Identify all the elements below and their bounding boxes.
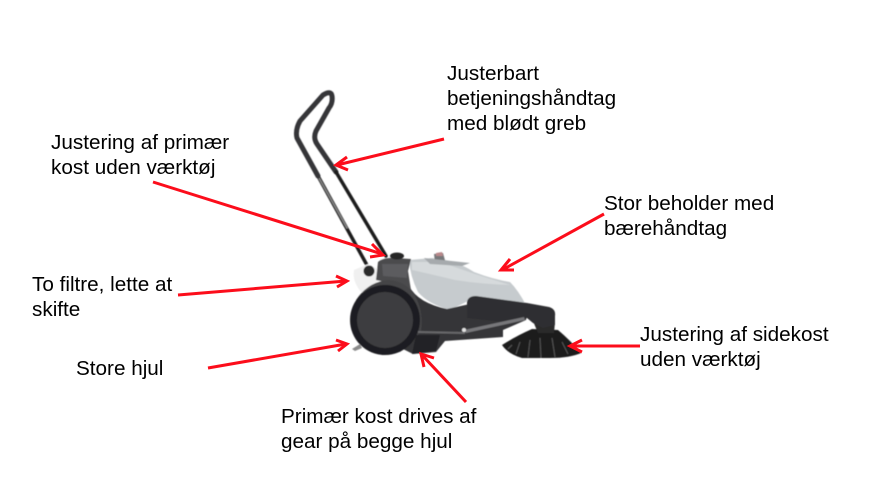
main grey container [409,258,526,310]
label: primary brush gear [281,405,476,453]
lower dark body [385,285,527,354]
label: primary brush adjustment: kost uden værktøj [51,156,215,179]
label: primary brush gear: Primær kost drives af [281,405,476,428]
frame rod [418,331,465,334]
side brush rod [464,317,525,333]
label: primary brush gear: gear på begge hjul [281,430,452,453]
wheel fender [356,280,422,352]
arrow: primary brush adjustment [153,182,383,257]
label: primary brush adjustment [51,131,229,179]
white filter housing [354,264,382,293]
label: large wheels: Store hjul [76,357,163,380]
label: adjustable handle [447,62,616,135]
handle [296,93,386,267]
container handle [434,253,446,264]
handle hinge [364,266,374,276]
arrow: handle [336,139,444,170]
arrow: filters [178,276,347,295]
label: adjustable handle: med blødt greb [447,112,586,135]
side brush neck [533,321,555,333]
label: large container [604,192,774,240]
top knob [390,252,404,260]
lower brush housing [412,335,440,354]
label: side brush adjustment: Justering af sidekost [640,323,829,346]
label: side brush adjustment [640,323,829,371]
label: primary brush adjustment: Justering af primær [51,131,229,154]
arrows [153,139,640,402]
side arm [467,296,555,328]
wheel [350,285,420,355]
label: large container: Stor beholder med [604,192,774,215]
label: two filters: skifte [32,298,80,321]
label: large container: bærehåndtag [604,217,727,240]
sweeper machine [296,93,581,358]
label: adjustable handle: Justerbart [447,62,539,85]
label: side brush adjustment: uden værktøj [640,348,761,371]
arrow: container [501,214,604,270]
arrow: primary brush gear [421,354,466,402]
arrow: side brush [570,340,640,352]
label: two filters: To filtre, lette at [32,273,172,296]
label: adjustable handle: betjeningshåndtag [447,87,616,110]
wheel stub [352,344,362,351]
arrow: wheels [208,340,347,368]
label: two filters [32,273,172,321]
side brush [502,329,581,358]
upper dark housing [376,258,412,296]
